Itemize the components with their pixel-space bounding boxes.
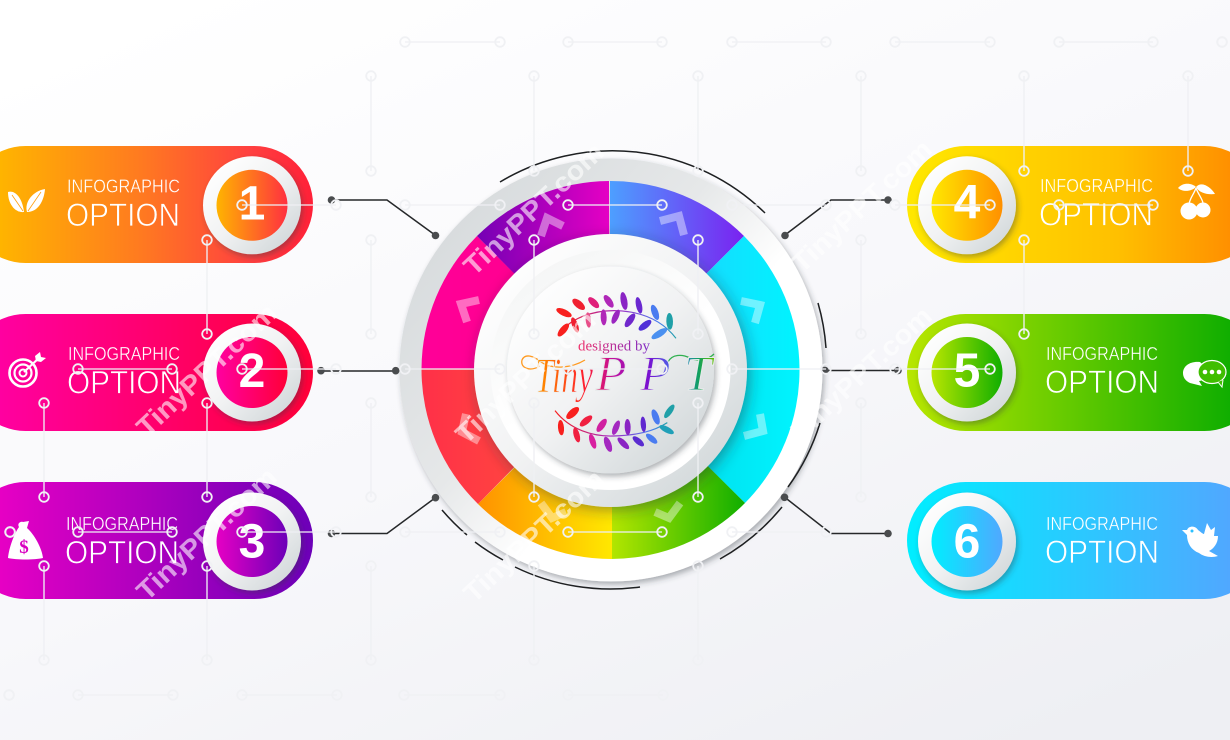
label	[1045, 513, 1159, 570]
logo: designed by Tiny PPT	[522, 292, 715, 453]
connector to option 1	[328, 196, 439, 239]
watermarks: TinyPPT.com	[131, 298, 283, 442]
number badge 1	[203, 156, 301, 254]
number badge 6	[918, 492, 1016, 590]
label	[1039, 175, 1153, 232]
number badge 2: 2	[239, 345, 265, 398]
number badge 2	[203, 324, 301, 422]
number badge 4	[918, 156, 1016, 254]
label	[65, 513, 179, 570]
watermarks: TinyPPT.com	[458, 464, 610, 608]
brand swashes	[522, 354, 714, 369]
connector to option 3	[328, 494, 439, 537]
bottom laurel wreath	[555, 403, 676, 453]
designed by: designed by	[578, 338, 651, 354]
outer grey ring	[400, 158, 822, 582]
option card 3	[0, 482, 313, 599]
label: OPTION	[67, 364, 181, 400]
label: OPTION	[1045, 364, 1159, 400]
black connector lines	[317, 196, 902, 537]
icon: money bag	[8, 521, 43, 560]
segment chevrons	[461, 216, 763, 518]
label	[66, 176, 180, 233]
watermarks	[131, 134, 938, 608]
icon: target	[10, 352, 46, 386]
icon: bird	[1182, 523, 1218, 557]
label: OPTION	[1045, 534, 1159, 570]
center wheel	[400, 158, 822, 582]
dark outer arcs	[442, 151, 826, 589]
option card 1	[0, 146, 313, 263]
label: OPTION	[66, 197, 180, 233]
label: INFOGRAPHIC	[68, 343, 180, 364]
watermarks: TinyPPT.com	[786, 134, 938, 278]
label: INFOGRAPHIC	[1040, 175, 1153, 196]
connector to option 5	[821, 367, 902, 374]
top laurel wreath	[555, 292, 676, 341]
number badge 6: 6	[954, 516, 980, 568]
brand name PPT: PPT	[595, 345, 715, 401]
watermarks: TinyPPT.com	[450, 305, 602, 449]
icon: cherries	[1178, 184, 1215, 220]
connector to option 2	[317, 367, 400, 375]
watermarks: TinyPPT.com	[131, 462, 283, 606]
brand name Tiny: Tiny	[535, 347, 594, 403]
label: INFOGRAPHIC	[67, 176, 180, 196]
label: INFOGRAPHIC	[1046, 343, 1158, 364]
label: INFOGRAPHIC	[66, 513, 178, 534]
number badge 5	[918, 324, 1016, 422]
option card 2	[0, 314, 313, 431]
connector to option 4	[781, 196, 892, 239]
rainbow segments	[421, 181, 800, 559]
label: OPTION	[65, 534, 179, 570]
option card 5	[907, 314, 1230, 431]
number badge 3: 3	[239, 516, 265, 568]
option card 4	[907, 146, 1230, 263]
option card 6	[907, 482, 1230, 599]
icon: money bag: $	[19, 537, 29, 558]
icon: speech bubbles	[1183, 360, 1226, 387]
number badge 5: 5	[954, 345, 980, 398]
label	[1045, 343, 1159, 400]
icon: leaves	[8, 189, 45, 212]
number badge 4: 4	[954, 176, 981, 230]
label: INFOGRAPHIC	[1046, 513, 1158, 534]
inner layered discs	[474, 234, 747, 507]
watermarks: TinyPPT.com	[786, 301, 938, 445]
number badge 1: 1	[239, 178, 265, 230]
label	[67, 343, 181, 400]
watermarks: TinyPPT.com	[458, 137, 610, 281]
connector to option 6	[781, 494, 892, 537]
label: OPTION	[1039, 196, 1153, 232]
number badge 3	[203, 492, 301, 590]
